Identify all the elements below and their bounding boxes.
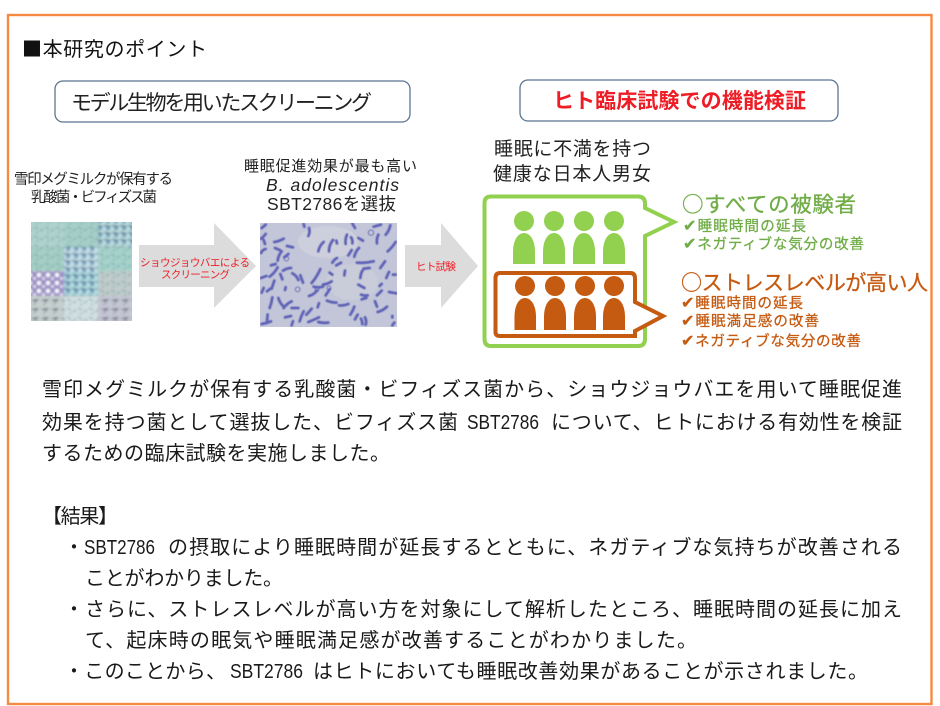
image: SBT2786 micrograph <box>258 221 399 329</box>
heading box: model organism screening: モデル生物を用いたスクリーニング <box>71 92 372 115</box>
results: high stress participants: ✔ネガティブな気分の改善 <box>681 331 861 350</box>
caption: participants <box>493 138 651 185</box>
results: high stress participants: ✔睡眠時間の延長 <box>681 293 803 312</box>
speech bubble: high stress participants <box>496 273 663 336</box>
arrow: human trial <box>405 223 478 308</box>
arrow: fruit fly screening: スクリーニング <box>161 268 230 281</box>
caption: participants: 健康な日本人男女 <box>493 163 651 185</box>
heading box: model organism screening <box>55 81 410 122</box>
results bullet list: ことがわかりました。 <box>85 567 283 590</box>
title: ■本研究のポイント <box>22 33 207 62</box>
results bullet list: ・ <box>64 537 84 559</box>
results: all participants: ○すべての被験者 <box>682 188 856 219</box>
results bullet list: はヒトにおいても睡眠改善効果があることが示されました。 <box>313 660 868 683</box>
caption: selected strain <box>244 158 417 214</box>
results bullet list: SBT2786 <box>84 537 155 559</box>
results: all participants: ✔ネガティブな気分の改善 <box>683 234 864 253</box>
results bullet list: て、起床時の眠気や睡眠満足感が改善することがわかりました。 <box>85 629 697 652</box>
results bullet list: ・このことから、 <box>64 661 226 683</box>
icon: green participants <box>513 211 625 264</box>
summary paragraph <box>42 378 902 465</box>
results: high stress participants: ✔睡眠満足感の改善 <box>681 311 819 330</box>
arrow: human trial: ヒト試験 <box>416 260 456 273</box>
summary paragraph: するための臨床試験を実施しました。 <box>42 442 390 465</box>
caption: strain library: 雪印メグミルクが保有する <box>14 171 173 188</box>
results bullet list: ・さらに、ストレスレベルが高い方を対象にして解析したところ、睡眠時間の延長に加え <box>64 598 902 621</box>
results bullet list: SBT2786 <box>230 661 303 683</box>
speech bubble: all participants <box>484 196 674 346</box>
caption: selected strain: 睡眠促進効果が最も高い <box>244 158 417 175</box>
image: bacteria micrograph collage <box>31 222 132 321</box>
results: high stress participants: ○ストレスレベルが高い人 <box>681 267 928 297</box>
summary paragraph: 効果を持つ菌として選抜した、ビフィズス菌 <box>42 411 458 434</box>
caption: selected strain: SBT2786を選抜 <box>267 194 396 214</box>
arrow: fruit fly screening: ショウジョウバエによる <box>140 257 250 269</box>
caption: strain library <box>14 171 173 206</box>
results: high stress participants <box>681 267 928 350</box>
results bullet list <box>64 535 902 683</box>
results: all participants: ✔睡眠時間の延長 <box>683 216 806 235</box>
caption: participants: 睡眠に不満を持つ <box>494 138 651 160</box>
results: all participants <box>682 188 864 253</box>
summary paragraph: SBT2786 <box>467 412 539 434</box>
caption: strain library: 乳酸菌・ビフィズス菌 <box>31 189 157 206</box>
heading box: human clinical trial <box>520 80 838 121</box>
results heading: 【結果】 <box>42 505 118 528</box>
caption: selected strain: B. adolescentis <box>266 175 399 195</box>
summary paragraph: 雪印メグミルクが保有する乳酸菌・ビフィズス菌から、ショウジョウバエを用いて睡眠促進 <box>42 378 902 401</box>
icon: orange participants <box>514 276 625 330</box>
arrow: fruit fly screening <box>139 223 256 308</box>
results bullet list: の摂取により睡眠時間が延長するとともに、ネガティブな気持ちが改善される <box>168 535 902 559</box>
heading box: human clinical trial: ヒト臨床試験での機能検証 <box>553 90 806 113</box>
summary paragraph: について、ヒトにおける有効性を検証 <box>551 411 902 434</box>
